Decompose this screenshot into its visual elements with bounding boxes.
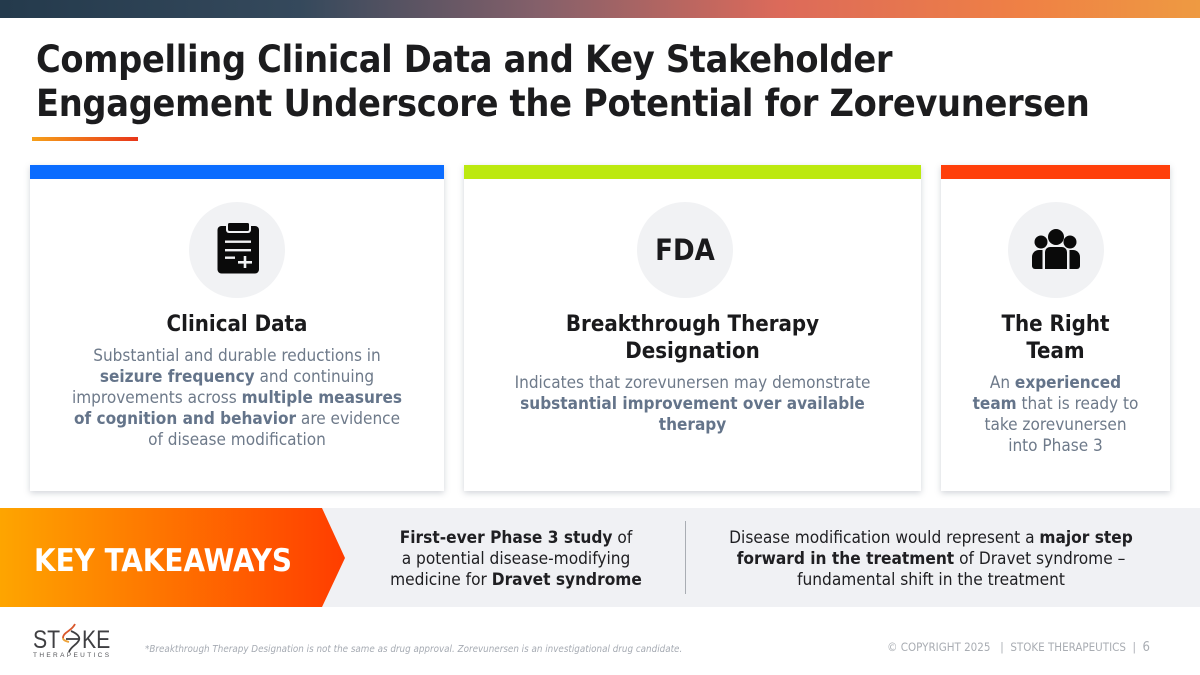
icon circle: FDA: [637, 202, 733, 298]
text: breakthrough therapy designation: substantial improvement over available: [520, 394, 865, 414]
logo wordmark: ST: ST: [33, 626, 60, 654]
heading: clinical data: Clinical Data: [167, 311, 307, 337]
heading: the right team: Team: [1026, 338, 1085, 364]
logo: stoke therapeutics: [33, 624, 111, 659]
heading: the right team: The Right: [1001, 311, 1110, 337]
heading: breakthrough therapy designation: Breakthrough Therapy: [566, 311, 819, 337]
logo subtitle: THERAPEUTICS: [33, 652, 111, 659]
text: clinical data: Substantial and durable reductions in: [93, 346, 381, 366]
takeaway: disease modification: forward in the treatment of Dravet syndrome –: [737, 549, 1125, 569]
takeaway: disease modification: Disease modification would represent a major step: [729, 528, 1133, 548]
heading: the right team: [1001, 311, 1110, 364]
icon: clipboard: [218, 223, 259, 274]
takeaway: phase 3 study: First-ever Phase 3 study of: [400, 528, 632, 548]
text: breakthrough therapy designation: [515, 373, 870, 435]
panel: breakthrough therapy: [464, 165, 921, 491]
heading: breakthrough therapy designation: [566, 311, 819, 364]
takeaway: phase 3 study: [390, 528, 642, 590]
panel: right team: [941, 165, 1170, 491]
panel top bar: green: [464, 165, 921, 179]
panel top bar: blue: [30, 165, 444, 179]
takeaway: disease modification: fundamental shift in the treatment: [797, 570, 1065, 590]
text: the right team: [972, 373, 1138, 456]
divider: [685, 521, 686, 594]
text: clinical data: of cognition and behavior are evidence: [74, 409, 400, 429]
takeaway: phase 3 study: medicine for Dravet syndrome: [390, 570, 642, 590]
panel top bar: red: [941, 165, 1170, 179]
text: clinical data: [72, 346, 402, 450]
logo helix mark: [62, 624, 80, 652]
text: clinical data: seizure frequency and continuing: [100, 367, 374, 387]
label: key takeaways: KEY TAKEAWAYS: [34, 543, 292, 579]
icon: FDA: FDA: [655, 233, 715, 267]
heading: breakthrough therapy designation: Designation: [625, 338, 760, 364]
takeaway: phase 3 study: a potential disease-modifying: [402, 549, 630, 569]
text: breakthrough therapy designation: Indicates that zorevunersen may demonstrate: [515, 373, 870, 393]
text: the right team: An experienced: [990, 373, 1121, 393]
title accent line: [32, 137, 138, 141]
top gradient band: [0, 0, 1200, 18]
arrow: key takeaways: [0, 508, 345, 607]
title: Compelling Clinical Data and Key Stakeholder: [36, 37, 892, 81]
takeaway: disease modification: [729, 528, 1133, 590]
icon circle: team: [1008, 202, 1104, 298]
text: the right team: take zorevunersen: [984, 415, 1127, 435]
text: the right team: team that is ready to: [973, 394, 1138, 414]
copyright and page number: © COPYRIGHT 2025 | STOKE THERAPEUTICS | 6: [887, 640, 1150, 655]
text: the right team: into Phase 3: [1008, 436, 1103, 456]
text: clinical data: of disease modification: [148, 430, 326, 450]
text: breakthrough therapy designation: therapy: [659, 415, 726, 435]
footnote: *Breakthrough Therapy Designation is not the same as drug approval. Zorevunersen is an investigational drug candidate.: [145, 644, 682, 655]
title: Engagement Underscore the Potential for Zorevunersen: [36, 81, 1089, 125]
icon circle: clipboard: [189, 202, 285, 298]
panel: key takeaways background: [0, 508, 1200, 607]
icon: team: [1032, 229, 1080, 269]
logo wordmark: KE: KE: [82, 626, 110, 654]
panel: clinical data: [30, 165, 444, 491]
title: [36, 37, 1089, 125]
text: clinical data: improvements across multiple measures: [72, 388, 402, 408]
